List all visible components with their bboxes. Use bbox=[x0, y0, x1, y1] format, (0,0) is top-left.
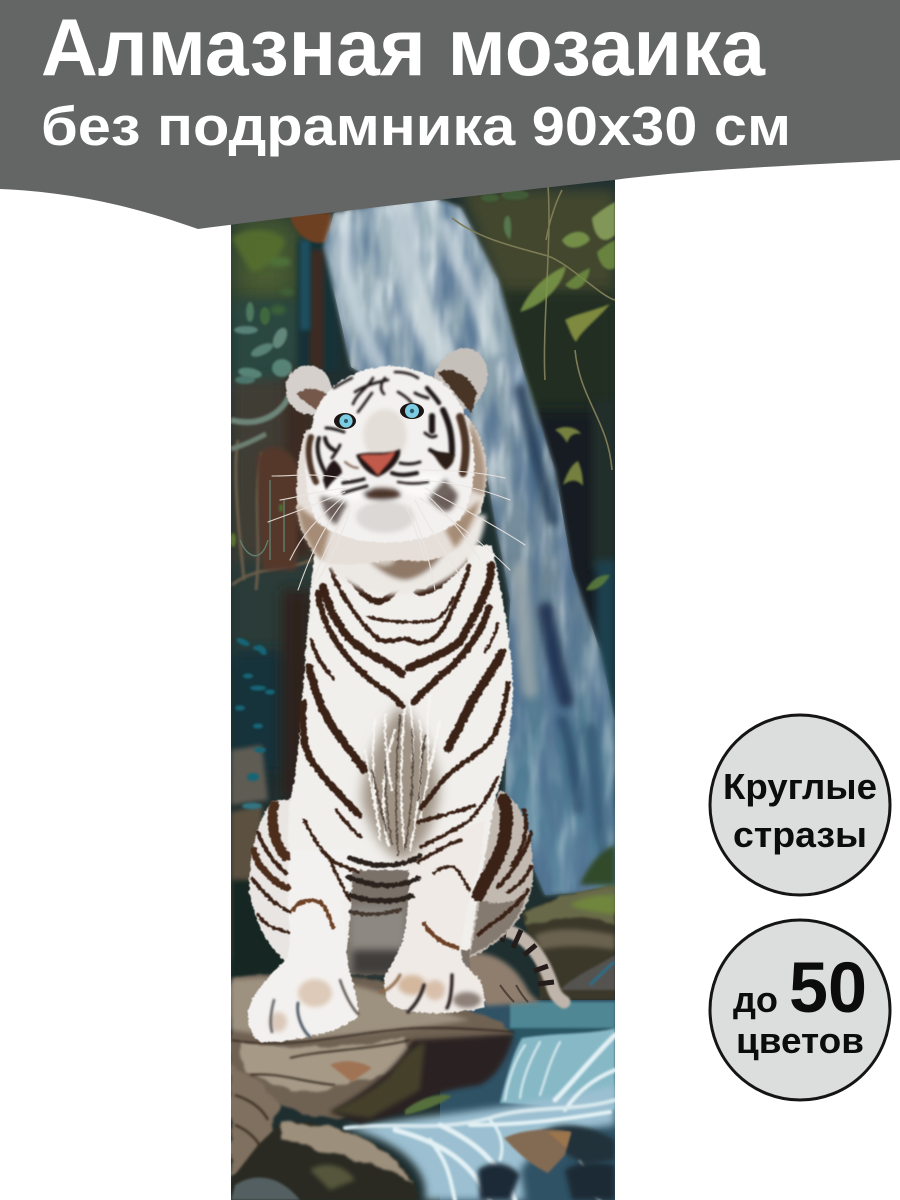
rocks and stream bbox=[231, 845, 615, 1200]
rear foot bbox=[455, 953, 542, 1006]
chest and torso bbox=[288, 545, 513, 960]
body stripes bbox=[252, 560, 531, 948]
foam mass bbox=[345, 1085, 615, 1200]
badge: round rhinestones: стразы bbox=[733, 814, 867, 855]
mossy rock right bbox=[521, 887, 615, 1000]
badge: up to 50 colours: до bbox=[733, 979, 778, 1020]
rear haunches and belly bbox=[249, 790, 533, 975]
painting: white tiger at waterfall bbox=[230, 170, 620, 1200]
ears bbox=[284, 347, 489, 416]
paw toes bbox=[271, 975, 452, 1037]
belly stripes bbox=[348, 856, 420, 914]
water pool bbox=[440, 1000, 615, 1200]
face stripes bbox=[309, 372, 466, 493]
subtitle: без подрамника 90х30 см bbox=[41, 95, 791, 157]
title: Алмазная мозаика bbox=[41, 3, 766, 93]
jungle background bbox=[231, 170, 617, 1200]
foliage bbox=[230, 186, 615, 809]
badge: up to 50 colours: цветов bbox=[736, 1020, 864, 1061]
head bbox=[305, 366, 474, 542]
tail bbox=[495, 925, 564, 1002]
lower rocks bbox=[231, 1065, 280, 1175]
chest fur bbox=[362, 695, 440, 860]
badge: round rhinestones bbox=[710, 715, 890, 895]
dark shadow left of tiger bbox=[231, 880, 290, 978]
header banner bbox=[0, 0, 900, 229]
rock ledge bbox=[231, 974, 514, 1117]
tiger bbox=[248, 339, 564, 1042]
waterfall bbox=[321, 199, 615, 898]
badge: up to 50 colours bbox=[710, 920, 890, 1100]
muzzle fur bbox=[318, 409, 458, 533]
eyes bbox=[334, 403, 424, 429]
badge: round rhinestones: Круглые bbox=[723, 766, 877, 807]
badge: up to 50 colours: 50 bbox=[789, 949, 867, 1028]
paw shading bbox=[269, 975, 481, 1032]
whiskers bbox=[268, 470, 525, 590]
front legs bbox=[246, 868, 486, 1044]
mane bbox=[296, 415, 487, 564]
nose bbox=[356, 449, 400, 477]
neck ruff bbox=[306, 515, 486, 595]
